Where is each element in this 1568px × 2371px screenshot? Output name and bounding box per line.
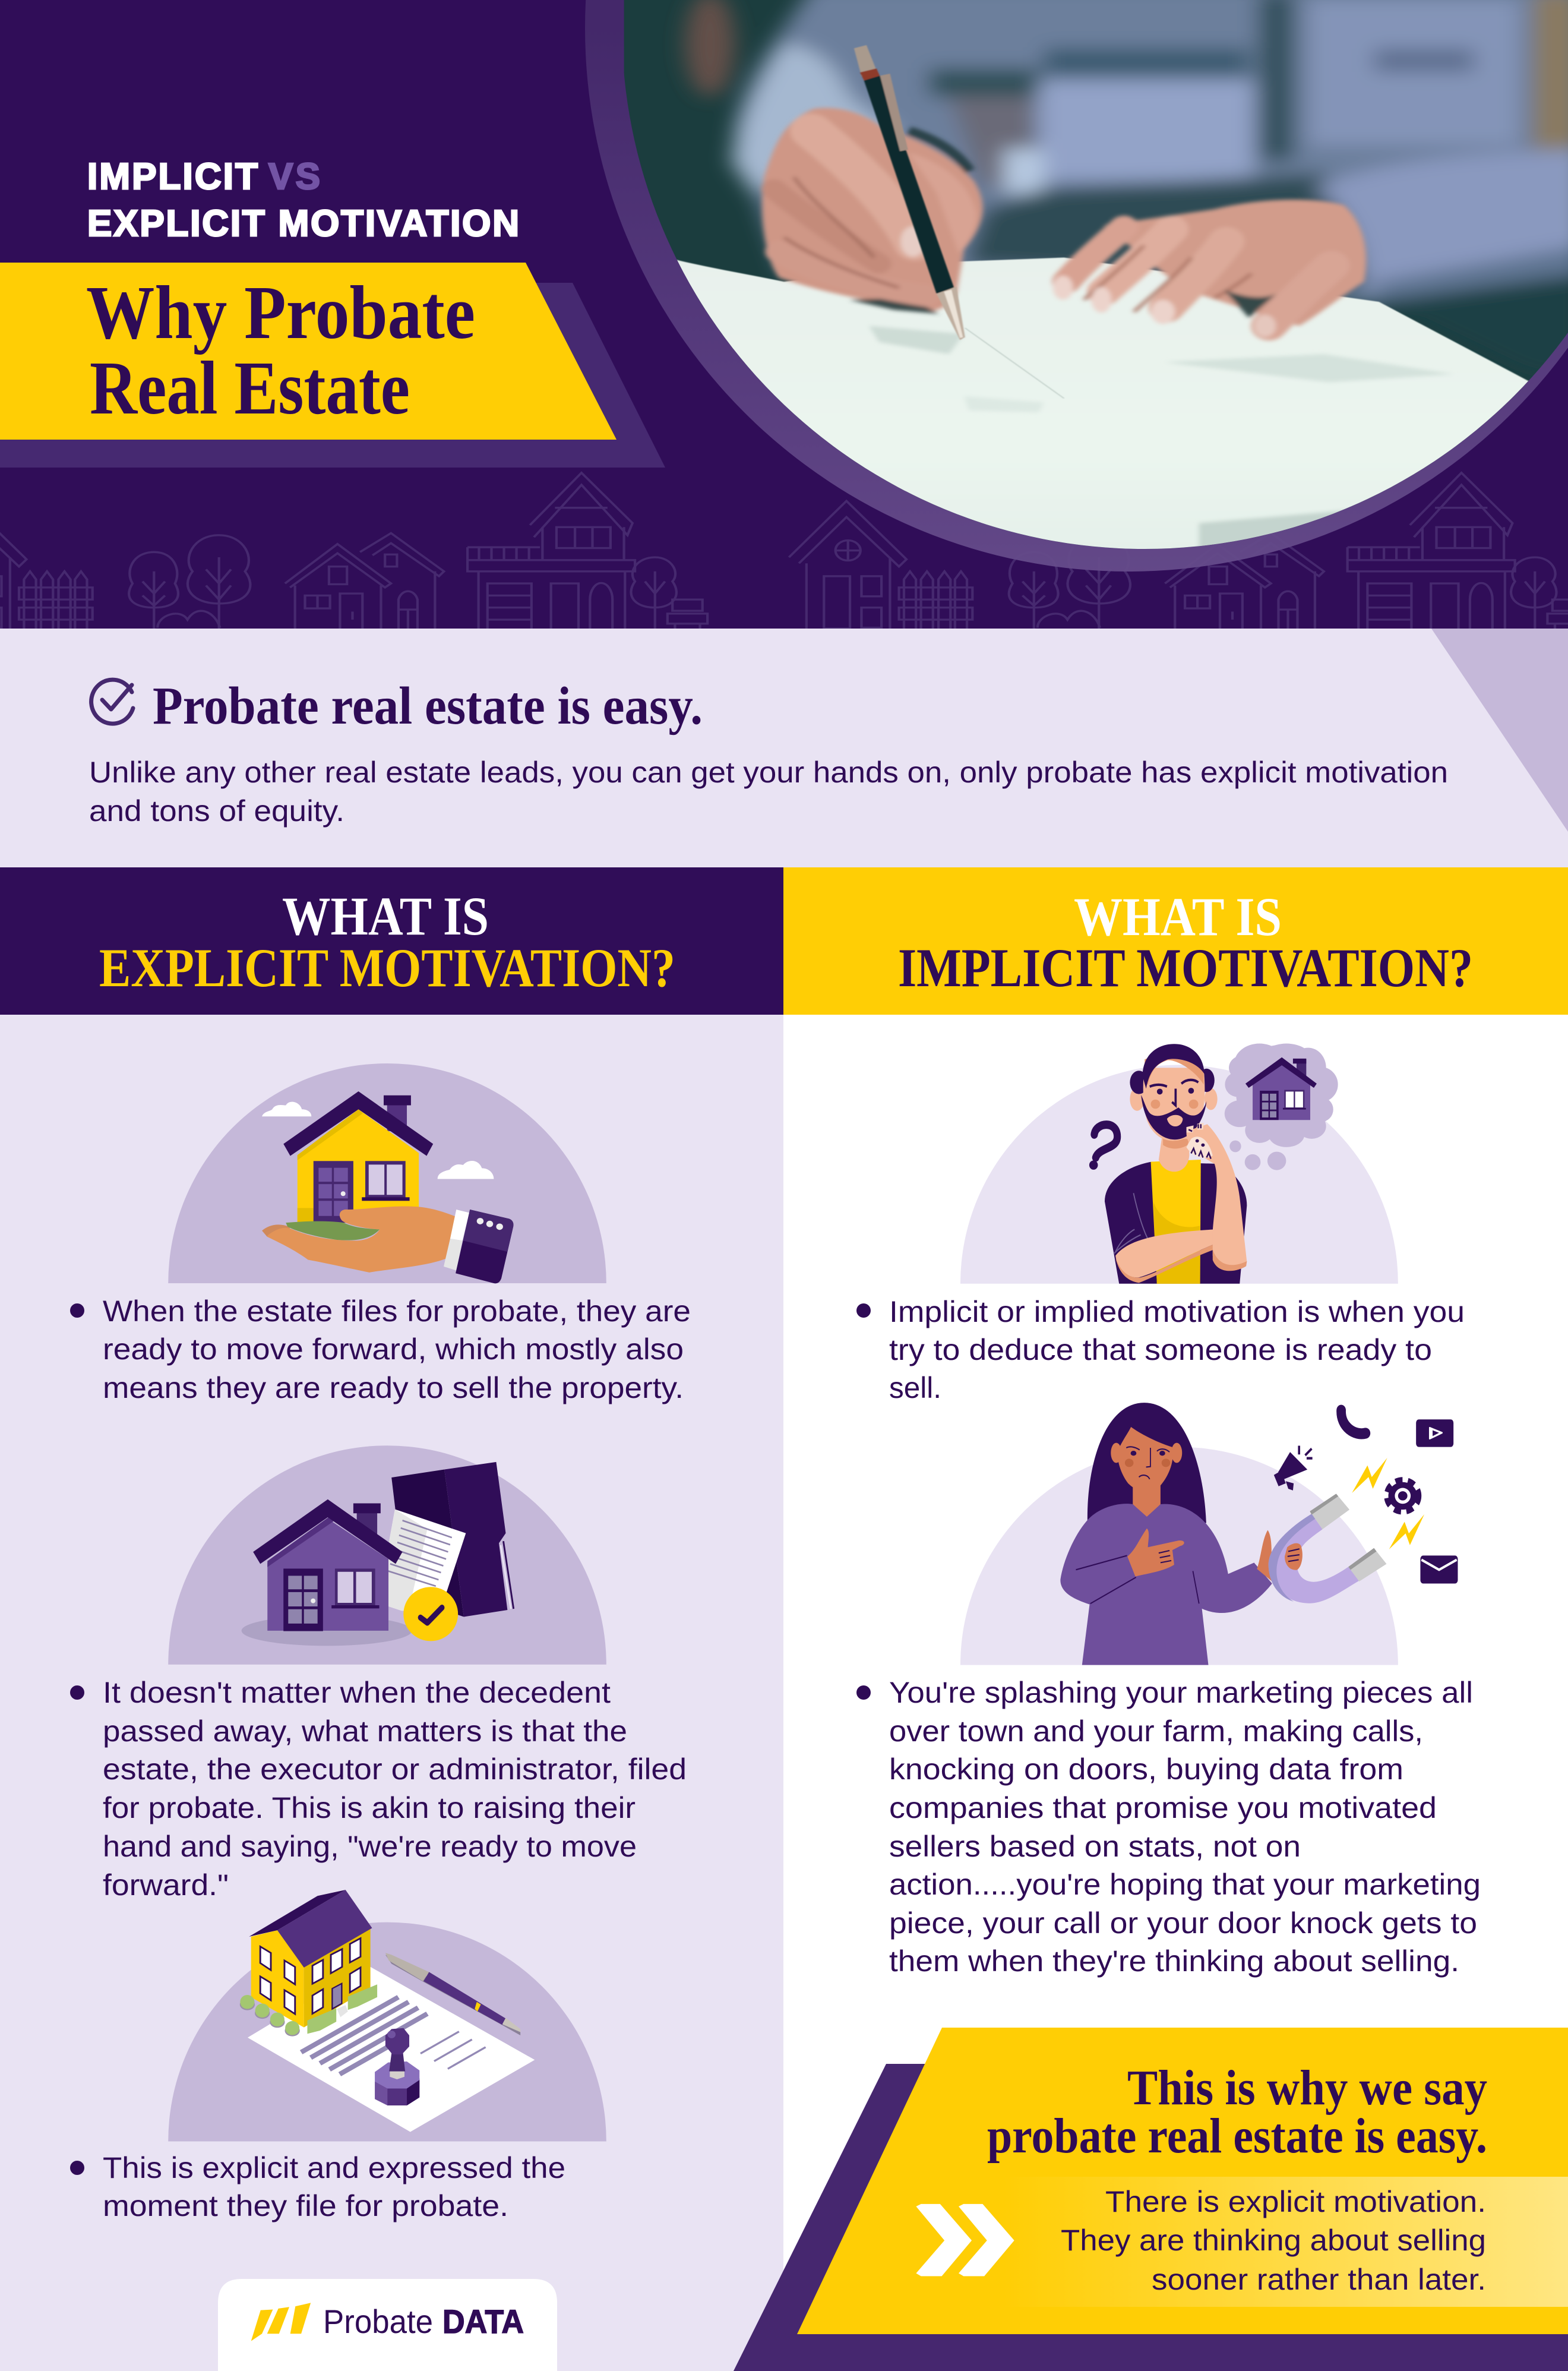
text: explicit point 2: for probate. This is akin to raising their [103, 1791, 636, 1824]
heading: what is explicit motivation: WHAT IS [282, 886, 489, 946]
text: implicit point 1: Implicit or implied motivation is when you [889, 1295, 1465, 1328]
text: explicit point 2: It doesn't matter when the decedent [103, 1676, 611, 1709]
intro text [89, 756, 1448, 828]
text: explicit point 2: forward." [103, 1868, 229, 1902]
header panel [0, 0, 1568, 644]
icon: phone [1341, 1410, 1365, 1434]
intro heading: Probate real estate is easy. [153, 677, 703, 735]
text: explicit point 1: means they are ready to sell the property. [103, 1371, 684, 1404]
callout heading [987, 2060, 1487, 2164]
icon: double chevron [916, 2204, 1014, 2276]
panel: explicit column [0, 1014, 783, 2371]
logo: Probate [323, 2303, 433, 2340]
header eyebrow text: EXPLICIT MOTIVATION [87, 203, 519, 244]
text: implicit point 2 [856, 1676, 1481, 1978]
hero banner [0, 263, 665, 468]
callout text: There is explicit motivation. [1105, 2185, 1486, 2218]
photo ring [585, 0, 1568, 572]
logo: DATA [442, 2303, 524, 2340]
callout text: sooner rather than later. [1152, 2263, 1486, 2296]
illustration: document, house and stamp [168, 1890, 606, 2142]
text: implicit point 2: companies that promise you motivated [889, 1791, 1437, 1824]
text: explicit point 2: hand and saying, "we're ready to move [103, 1830, 637, 1863]
text: explicit point 1 [70, 1295, 691, 1404]
callout text [1061, 2185, 1486, 2296]
text: explicit point 2: passed away, what matters is that the [103, 1715, 627, 1748]
photo: hands signing a document [624, 0, 1568, 549]
intro text: Unlike any other real estate leads, you can get your hands on, only probate has explicit motivation [89, 756, 1448, 789]
magnet [1269, 1494, 1386, 1603]
text: implicit point 1 [856, 1295, 1465, 1404]
text: implicit point 2: over town and your farm, making calls, [889, 1715, 1423, 1748]
text: explicit point 3: This is explicit and expressed the [103, 2151, 565, 2184]
text: implicit point 2: knocking on doors, buying data from [889, 1753, 1403, 1786]
intro panel [0, 629, 1568, 869]
text: implicit point 2: action.....you're hoping that your marketing [889, 1868, 1481, 1901]
text: implicit point 2: piece, your call or your door knock gets to [889, 1906, 1477, 1940]
heading: what is explicit motivation [0, 867, 783, 1015]
header eyebrow text [87, 156, 519, 244]
header eyebrow text: VS [268, 156, 320, 197]
text: explicit point 1: When the estate files for probate, they are [103, 1295, 691, 1328]
thought bubble [1225, 1044, 1338, 1170]
icon: lightning [1389, 1514, 1424, 1549]
callout heading: This is why we say [1127, 2060, 1487, 2116]
callout text: They are thinking about selling [1061, 2224, 1486, 2257]
icon: question mark [1089, 1125, 1117, 1170]
icon: megaphone [1274, 1446, 1313, 1491]
text: implicit point 2: them when they're thinking about selling. [889, 1944, 1459, 1978]
background pattern: houses and trees [0, 473, 1568, 630]
illustration: woman with magnet [960, 1403, 1458, 1665]
header eyebrow text: IMPLICIT [87, 156, 258, 197]
icon: lightning [1352, 1458, 1387, 1493]
illustration: thinking man [960, 1044, 1398, 1284]
text: implicit point 2: You're splashing your marketing pieces all [889, 1676, 1473, 1709]
icon: gear [1386, 1480, 1419, 1512]
icon: mail [1420, 1555, 1458, 1584]
heading: what is implicit motivation: WHAT IS [1074, 886, 1282, 947]
icon: logo bars [251, 2303, 311, 2341]
logo [218, 2279, 557, 2371]
text: implicit point 1: try to deduce that someone is ready to [889, 1333, 1432, 1366]
main title: Why Probate [86, 270, 475, 355]
text: implicit point 2: sellers based on stats, not on [889, 1830, 1301, 1863]
heading: what is explicit motivation: EXPLICIT MOTIVATION? [99, 937, 675, 998]
main title [86, 270, 475, 430]
text: explicit point 3 [70, 2151, 565, 2222]
intro text: and tons of equity. [89, 794, 344, 828]
callout heading: probate real estate is easy. [987, 2108, 1487, 2164]
text: explicit point 2: estate, the executor or administrator, filed [103, 1753, 687, 1786]
illustration: house and folder [168, 1445, 606, 1665]
text: explicit point 3: moment they file for probate. [103, 2189, 508, 2222]
illustration: house in hand [168, 1063, 606, 1283]
heading: what is implicit motivation: IMPLICIT MOTIVATION? [898, 937, 1473, 998]
text: explicit point 1: ready to move forward, which mostly also [103, 1333, 684, 1366]
main title: Real Estate [90, 346, 410, 430]
icon: check circle [91, 680, 133, 724]
text: implicit point 1: sell. [889, 1371, 941, 1404]
heading: what is implicit motivation [783, 867, 1568, 1015]
icon: video [1416, 1419, 1453, 1447]
text: explicit point 2 [70, 1676, 687, 1902]
callout: why probate is easy [734, 2028, 1568, 2371]
